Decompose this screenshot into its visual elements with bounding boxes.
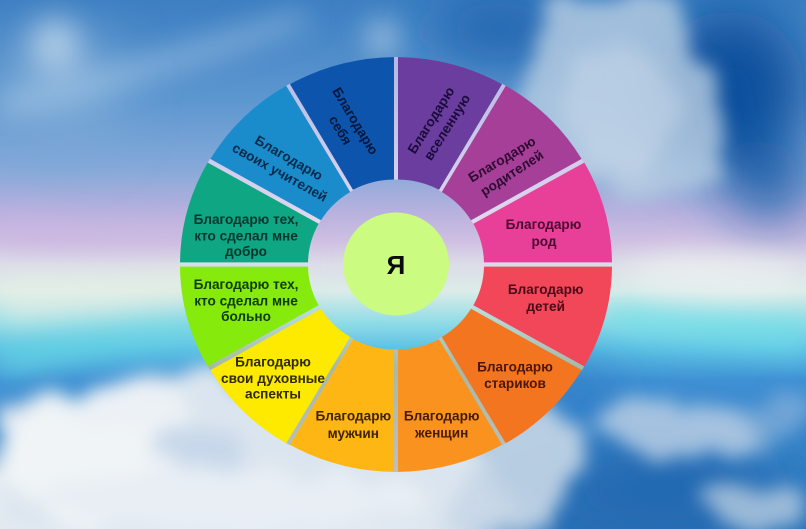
segment: Благодарю себя: Благодарю (329, 85, 381, 158)
segment: Благодарю женщин: женщин (414, 426, 468, 440)
segment: Благодарю свои духовные аспекты: Благодарю (235, 354, 311, 370)
segment: Благодарю род: род (531, 234, 557, 249)
segment: Благодарю мужчин: мужчин (328, 426, 379, 441)
segment: Благодарю стариков: Благодарю (477, 360, 553, 374)
segment: Благодарю свои духовные аспекты: аспекты (245, 386, 301, 402)
segment: Благодарю детей: детей (526, 299, 565, 314)
segment: Благодарю тех, кто сделал мне больно: Благодарю тех, (194, 277, 298, 292)
segment: Благодарю стариков: стариков (484, 376, 546, 391)
segment: Благодарю детей: Благодарю (508, 282, 584, 297)
segment: Благодарю стариков (442, 309, 582, 443)
gaps between segments (180, 57, 612, 472)
segment: Благодарю вселенную: вселенную (421, 91, 473, 163)
segment: Благодарю тех, кто сделал мне больно (180, 267, 319, 366)
segment: Благодарю тех, кто сделал мне добро: добро (225, 244, 267, 259)
center circle: Я (343, 212, 449, 316)
segment: Благодарю тех, кто сделал мне добро: кто сделал мне (194, 228, 298, 244)
segment: Благодарю себя: себя (326, 113, 355, 147)
segment: Благодарю женщин: Благодарю (404, 408, 480, 424)
segment: Благодарю родителей: Благодарю (466, 133, 539, 185)
segment: Благодарю своих учителей (210, 86, 350, 220)
cloud bank base (0, 360, 560, 529)
segment: Благодарю женщин (398, 339, 502, 472)
segment: Благодарю свои духовные аспекты: свои духовные (221, 371, 325, 386)
segment: Благодарю вселенную (398, 57, 502, 190)
segment: Благодарю тех, кто сделал мне добро (180, 163, 319, 262)
segment: Благодарю родителей (442, 86, 582, 220)
segment: Благодарю мужчин (290, 339, 394, 472)
segment: Благодарю род: Благодарю (506, 217, 582, 232)
segment: Благодарю вселенную: Благодарю (405, 84, 458, 156)
segment: Благодарю мужчин: Благодарю (315, 408, 392, 424)
segment: Благодарю своих учителей: Благодарю (252, 133, 326, 184)
segment: Благодарю род (473, 163, 612, 262)
center circle: Я: Я (387, 250, 405, 280)
segment: Благодарю свои духовные аспекты (210, 309, 350, 443)
segment: Благодарю себя (290, 57, 394, 190)
segment: Благодарю родителей: родителей (478, 147, 546, 199)
segment: Благодарю тех, кто сделал мне больно: больно (221, 309, 271, 324)
segment: Благодарю тех, кто сделал мне больно: кто сделал мне (194, 294, 298, 308)
segment: Благодарю детей (473, 267, 612, 366)
segment: Благодарю тех, кто сделал мне добро: Благодарю тех, (194, 212, 298, 227)
wheel of gratitude (180, 57, 612, 472)
segment: Благодарю своих учителей: своих учителей (230, 140, 330, 205)
